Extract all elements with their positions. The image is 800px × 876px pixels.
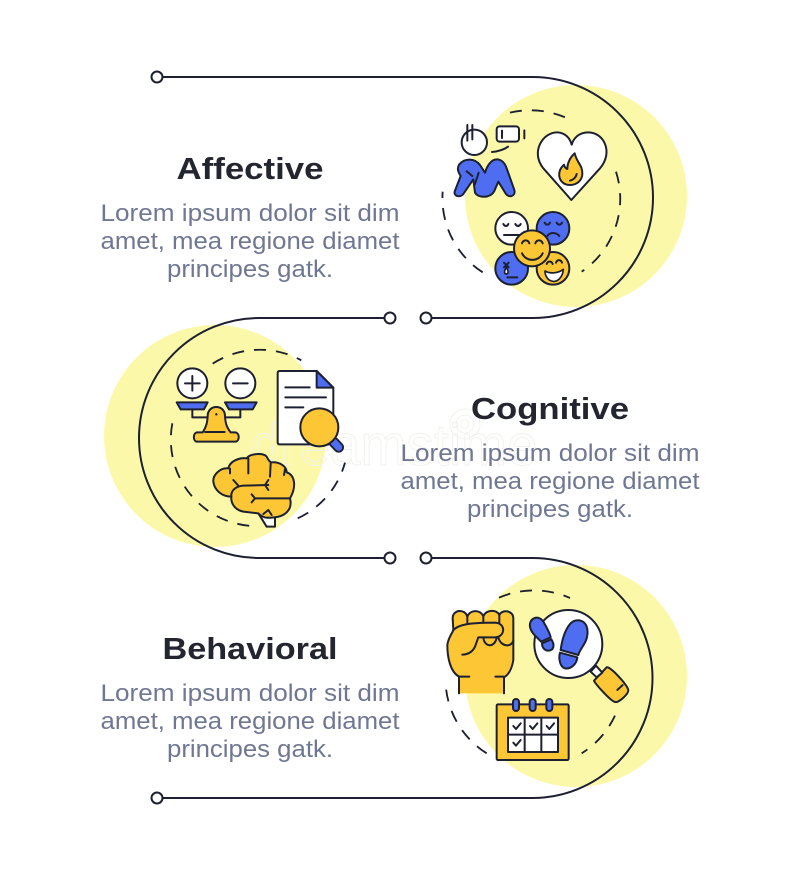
- text block: affective description: principes gatk.: [167, 256, 333, 283]
- text block: affective description: Lorem ipsum dolor sit dim: [100, 200, 400, 227]
- icon: brain: [213, 454, 294, 527]
- heading: Affective: Affective: [176, 151, 324, 186]
- yellow circle: behavioral: [465, 565, 687, 787]
- icon: footprints in magnifier: [530, 610, 628, 702]
- icon: clenched fist: [447, 611, 513, 693]
- text block: cognitive description: amet, mea regione diamet: [400, 468, 700, 495]
- text block: behavioral description: principes gatk.: [167, 736, 333, 763]
- heading: Behavioral: Behavioral: [162, 631, 338, 666]
- text block: affective description: [100, 200, 400, 283]
- icon: exhausted person with low battery: [455, 125, 519, 197]
- icon: heart with flame: [538, 132, 607, 200]
- icon: balance scale with plus and minus: [177, 368, 257, 442]
- icon: calendar with checkmarks: [497, 699, 569, 760]
- text block: cognitive description: [400, 440, 700, 523]
- connector line: behavioral: [152, 552, 652, 804]
- connector line: affective: [152, 72, 653, 324]
- icon group: behavioral: [446, 590, 628, 760]
- text block: behavioral description: Lorem ipsum dolor sit dim: [100, 680, 400, 707]
- icon: document with magnifier: [278, 371, 339, 447]
- dashed ring: affective: [442, 110, 620, 272]
- text block: cognitive description: Lorem ipsum dolor sit dim: [400, 440, 700, 467]
- icon: group of emoji faces: [495, 212, 569, 285]
- text block: behavioral description: amet, mea regione diamet: [100, 708, 400, 735]
- icon group: affective: [442, 110, 620, 285]
- text block: cognitive description: principes gatk.: [467, 496, 633, 523]
- connector line: cognitive: [139, 312, 396, 564]
- yellow circle: affective: [465, 85, 687, 307]
- yellow circle: cognitive: [104, 325, 326, 547]
- heading: Cognitive: Cognitive: [471, 391, 629, 426]
- watermark: dreamstime: [250, 413, 538, 478]
- text block: affective description: amet, mea regione diamet: [100, 228, 400, 255]
- dashed ring: cognitive: [171, 350, 345, 526]
- text block: behavioral description: [100, 680, 400, 763]
- dashed ring: behavioral: [446, 590, 615, 753]
- icon group: cognitive: [171, 350, 345, 527]
